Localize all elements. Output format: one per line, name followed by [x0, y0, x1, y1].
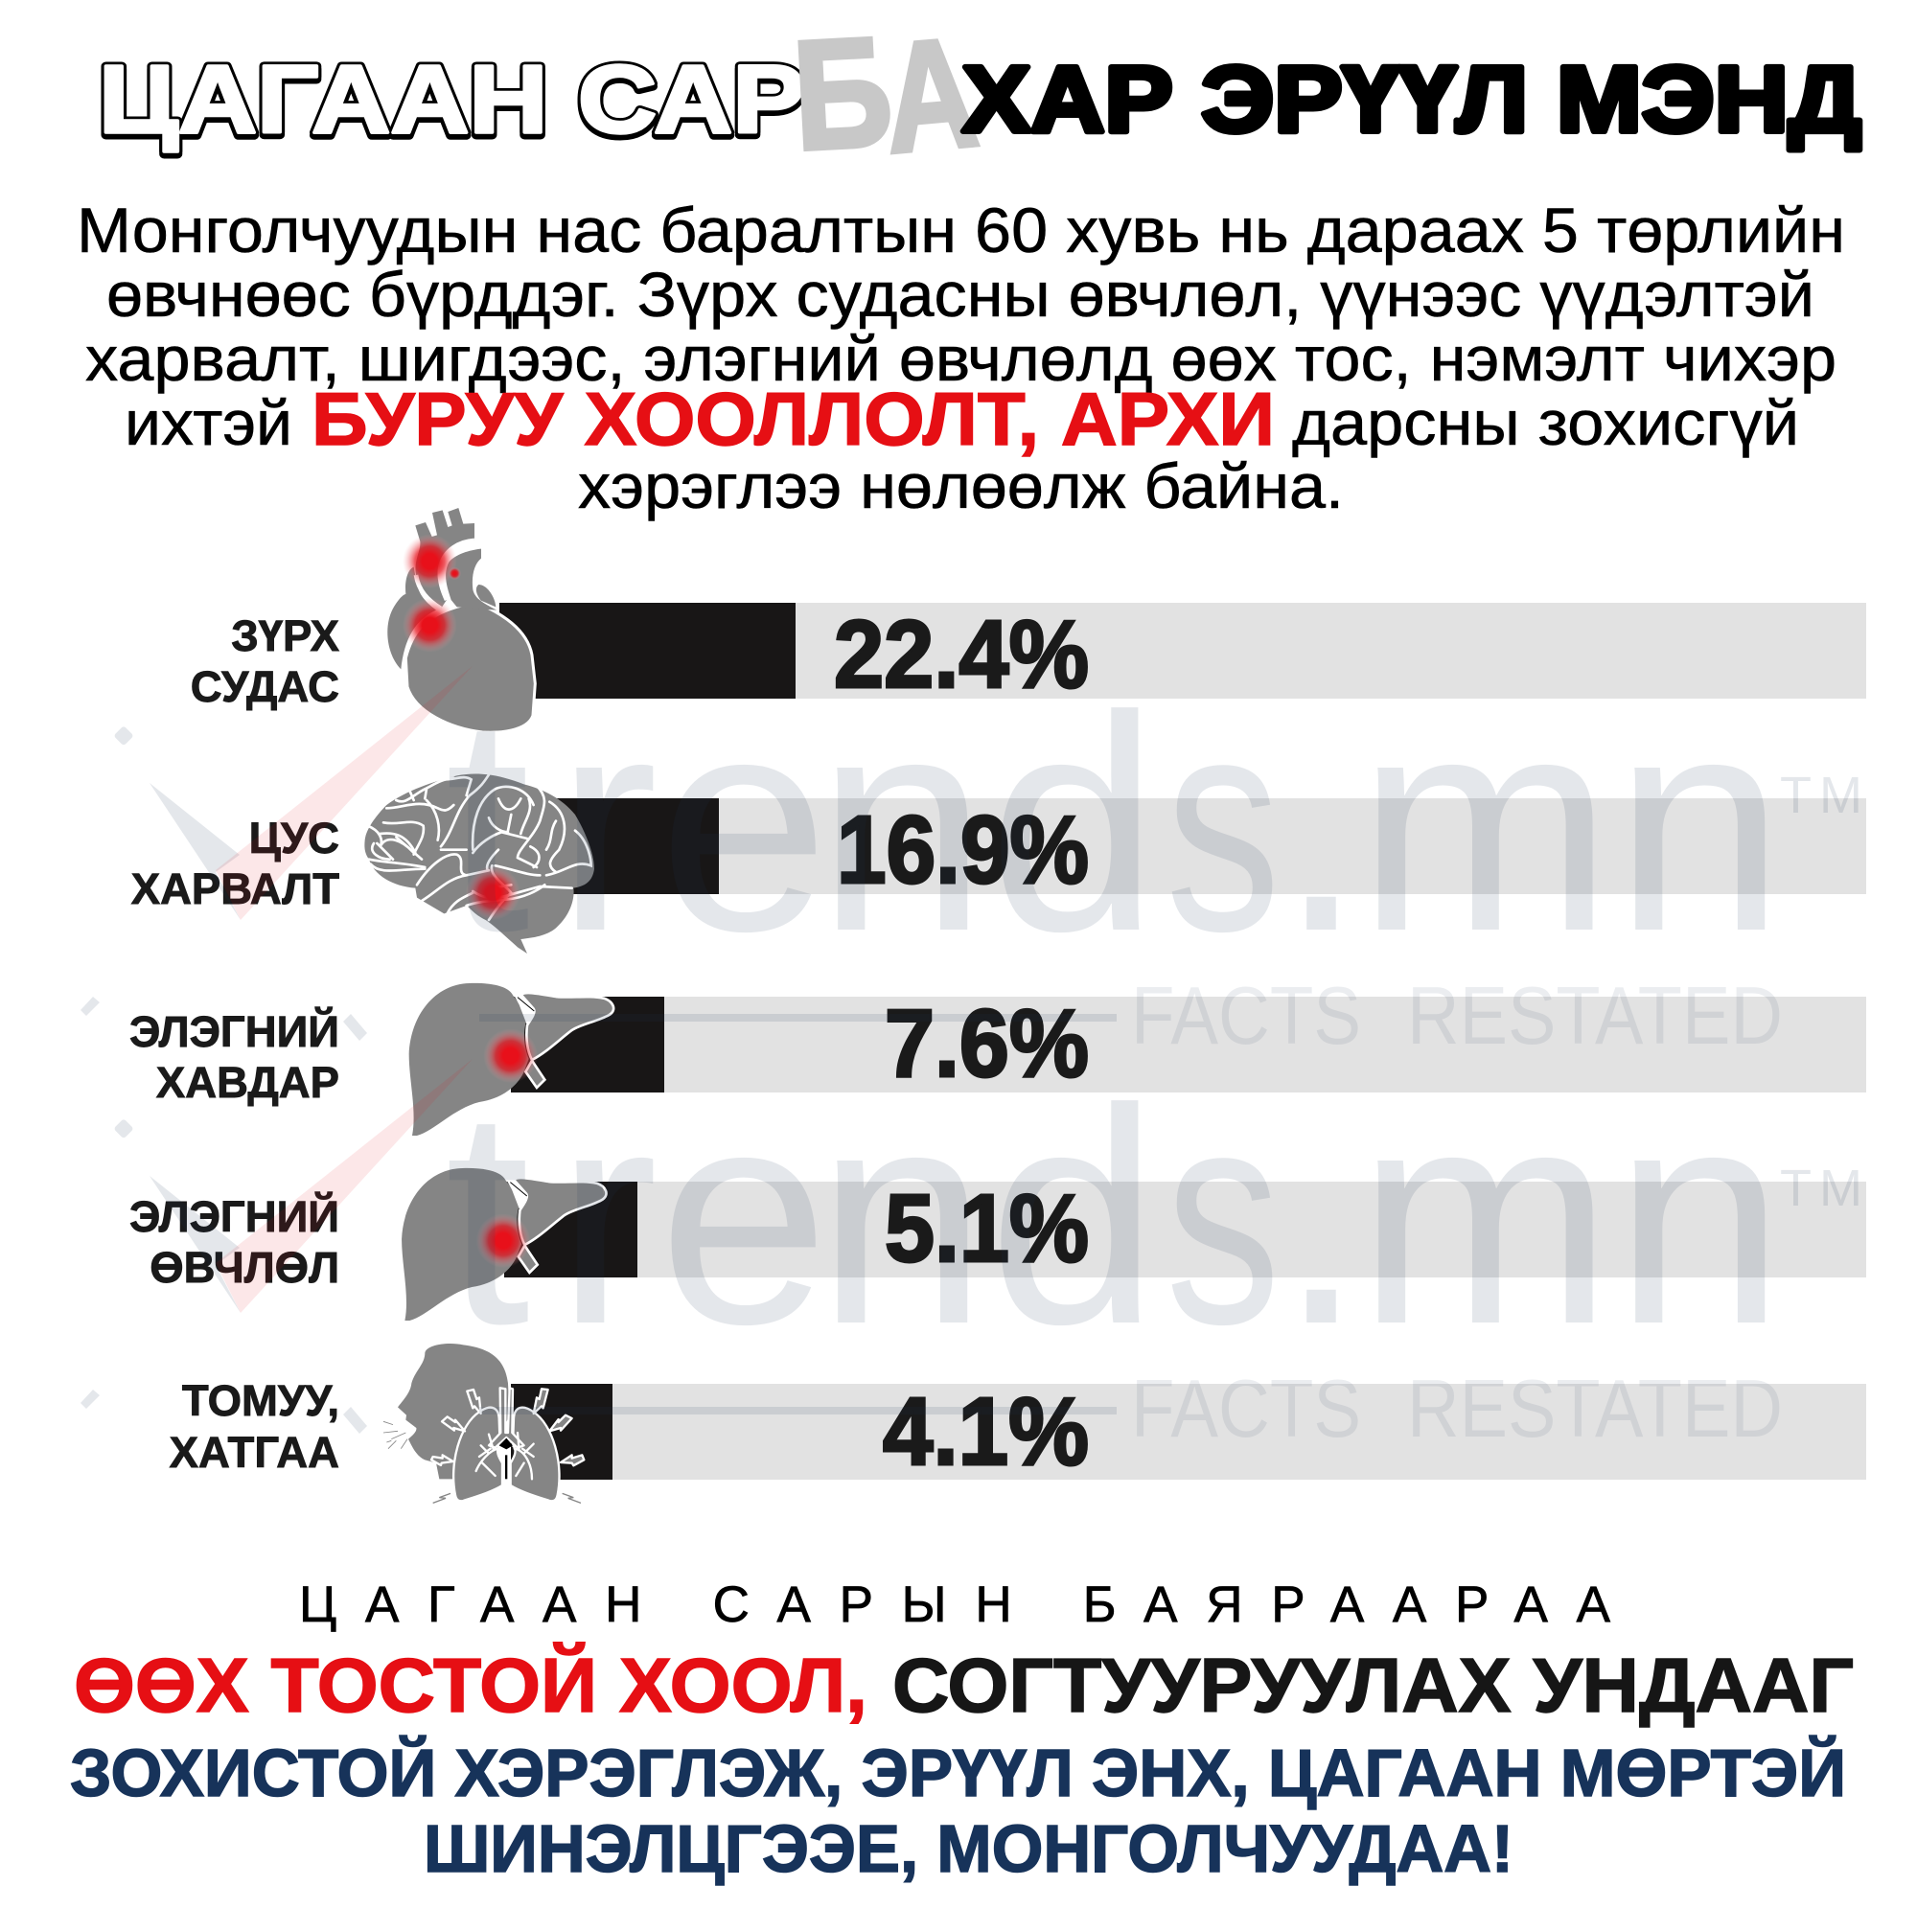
watermark tagline: RESTATED: [1407, 971, 1783, 1062]
title: grey BA: [789, 5, 984, 186]
title: white sar outlined: ЦАГААН САР: [99, 49, 805, 156]
footer: navy closing lines: ШИНЭЛЦГЭЭЕ, МОНГОЛЧУУДАА!: [424, 1811, 1513, 1886]
watermark: trends.mn logo, bottom copy: [81, 1045, 1862, 1455]
title: black health: ХАР ЭРҮҮЛ МЭНД: [962, 47, 1861, 151]
watermark trademark 2: TM: [1780, 1160, 1862, 1217]
watermark wordmark 2: .mn: [1279, 1045, 1785, 1388]
title: white sar outlined: ЦАГААН САР: [99, 46, 805, 153]
intro text block: дарсны зохисгүй: [1292, 387, 1799, 458]
watermark checkmark 2: [81, 1059, 473, 1434]
footer: navy closing lines: ЗОХИСТОЙ ХЭРЭГЛЭЖ, ЭРҮҮЛ ЭНХ, ЦАГААН МӨРТЭЙ: [70, 1735, 1846, 1810]
watermark tagline: [479, 971, 1783, 1062]
watermark tagline 2: FACTS: [1131, 1364, 1361, 1455]
watermark trademark: TM: [1780, 767, 1862, 824]
bar chart: [499, 601, 1866, 1485]
intro text block: хэрэглээ нөлөөлж байна.: [578, 450, 1344, 521]
intro text block: харвалт, шигдээс, элэгний өвчлөлд өөх тос, нэмэлт чихэр: [85, 323, 1836, 394]
bar tracks: [499, 603, 1866, 1480]
watermark tagline 2: RESTATED: [1407, 1364, 1783, 1455]
row labels: ЗҮРХ: [231, 611, 339, 660]
watermark: trends.mn logo, top copy: [81, 652, 1862, 1062]
row labels: ӨВЧЛӨЛ: [150, 1243, 339, 1292]
percentages: 4.1%: [883, 1378, 1089, 1485]
watermark wordmark: .mn: [1279, 652, 1785, 995]
percentages: [834, 601, 1089, 1485]
row labels: ХАРВАЛТ: [131, 864, 339, 913]
icon: coughing head and lungs: [383, 1344, 584, 1503]
row labels: ТОМУУ,: [182, 1376, 339, 1425]
watermark wordmark: [445, 652, 1785, 995]
intro text block: өвчнөөс бүрддэг. Зүрх судасны өвчлөл, үүнээс үүдэлтэй: [106, 259, 1814, 330]
intro text block: ихтэй: [125, 387, 292, 458]
icon: brain: [364, 773, 594, 954]
watermark checkmark: [81, 666, 473, 1041]
row labels: ЭЛЭГНИЙ: [129, 1191, 339, 1241]
footer: red and black warning line: СОГТУУРУУЛАХ УНДААГ: [892, 1643, 1854, 1728]
percentages: 22.4%: [834, 601, 1089, 708]
watermark wordmark: trend: [445, 652, 1159, 995]
watermark wordmark 2: s: [1166, 1045, 1281, 1388]
icon: liver disease: [402, 1168, 607, 1321]
watermark tagline: FACTS: [1131, 971, 1361, 1062]
intro text block: [77, 195, 1845, 521]
title: grey BA: А: [877, 6, 984, 186]
percentages: 7.6%: [885, 990, 1089, 1097]
row labels: ЭЛЭГНИЙ: [129, 1006, 339, 1056]
row labels: [129, 611, 339, 1477]
row labels: ХАВДАР: [156, 1058, 339, 1107]
row labels: ХАТГАА: [170, 1428, 339, 1477]
watermark tagline 2: [479, 1364, 1783, 1455]
title: white sar outlined: ЦАГААН САР: [99, 46, 805, 153]
watermark wordmark: s: [1166, 652, 1281, 995]
percentages: 5.1%: [885, 1175, 1089, 1282]
watermark wordmark 2: [445, 1045, 1785, 1388]
icon: heart: [387, 508, 535, 732]
title: grey BA: Б: [789, 5, 896, 183]
watermark wordmark 2: trend: [445, 1045, 1159, 1388]
percentages: 16.9%: [837, 796, 1089, 904]
footer: navy closing lines: [70, 1735, 1846, 1886]
intro text block: БУРУУ ХООЛЛОЛТ, АРХИ: [312, 377, 1275, 461]
row labels: ЦУС: [249, 814, 339, 862]
row labels: СУДАС: [191, 662, 339, 711]
footer: red and black warning line: ӨӨХ ТОСТОЙ ХООЛ,: [74, 1642, 867, 1728]
bar values: [499, 603, 796, 1480]
footer: spaced line: ЦАГААН САРЫН БАЯРААРАА: [299, 1576, 1611, 1633]
footer: red and black warning line: [74, 1642, 1854, 1728]
intro text block: Монголчуудын нас баралтын 60 хувь нь дараах 5 төрлийн: [77, 195, 1845, 265]
icon: liver cancer: [409, 983, 613, 1136]
